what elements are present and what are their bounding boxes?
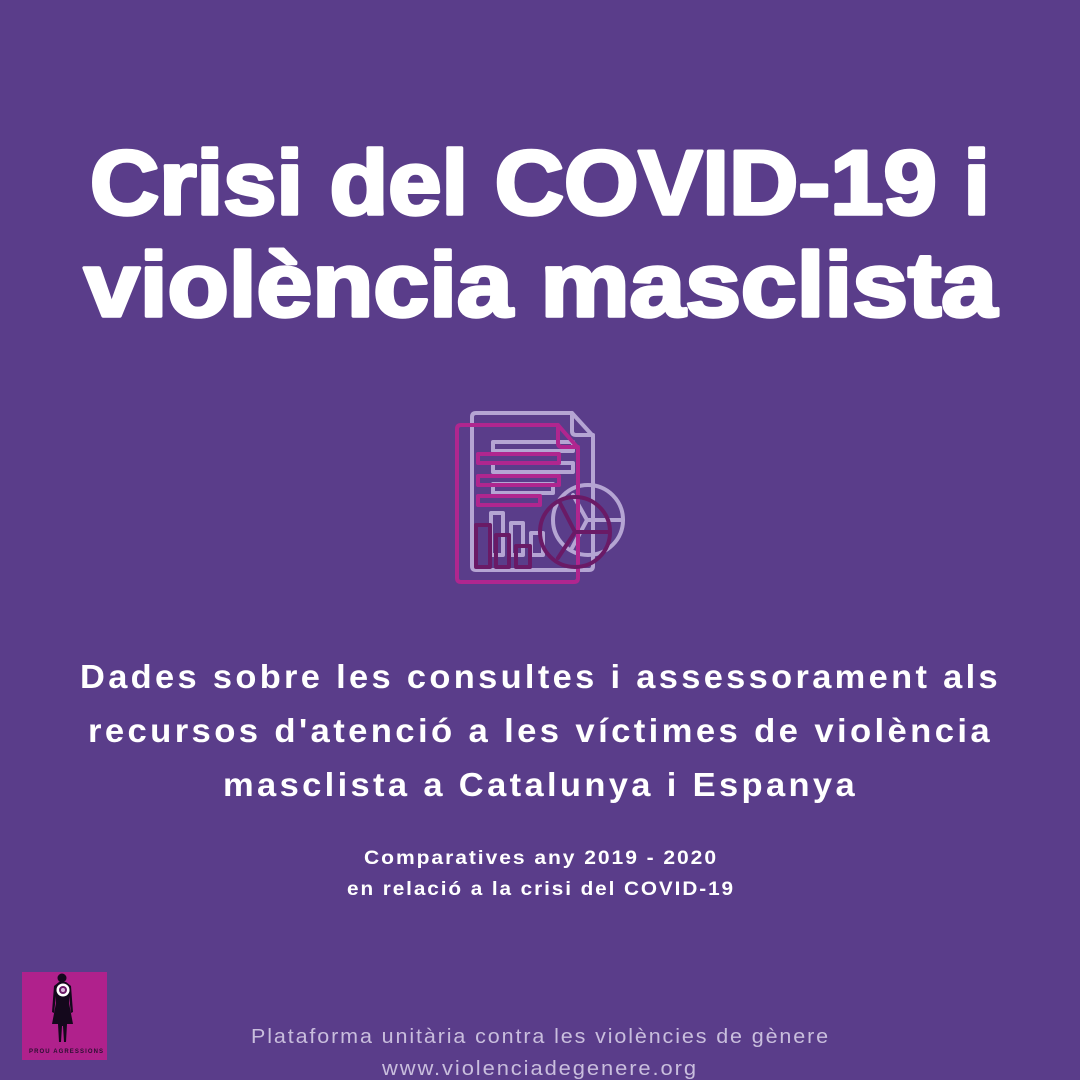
logo caption: PROU AGRESSIONS bbox=[29, 1049, 103, 1055]
footer: Plataforma unitària contra les violències de gènere bbox=[251, 1025, 830, 1048]
icon: light document layer bbox=[472, 413, 623, 570]
icon: magenta document layer bbox=[457, 425, 578, 582]
subtitle: Dades sobre les consultes i assessorament als bbox=[80, 658, 1001, 695]
footer bbox=[251, 1025, 830, 1080]
icon: female silhouette with target bbox=[52, 974, 73, 1042]
title: Crisi del COVID-19 i bbox=[90, 133, 990, 234]
icon: dark chart layer bbox=[476, 497, 610, 567]
title bbox=[84, 133, 999, 336]
subtitle bbox=[80, 658, 1001, 803]
title: violència masclista bbox=[84, 235, 999, 336]
logo: Prou Agressions bbox=[22, 972, 107, 1060]
comparison note bbox=[347, 847, 735, 900]
comparison note: Comparatives any 2019 - 2020 bbox=[364, 847, 718, 869]
subtitle: masclista a Catalunya i Espanya bbox=[223, 766, 858, 803]
comparison note: en relació a la crisi del COVID-19 bbox=[347, 878, 735, 900]
icon: report document with charts bbox=[457, 413, 623, 582]
footer: www.violenciadegenere.org bbox=[381, 1057, 698, 1080]
subtitle: recursos d'atenció a les víctimes de violència bbox=[88, 712, 993, 749]
